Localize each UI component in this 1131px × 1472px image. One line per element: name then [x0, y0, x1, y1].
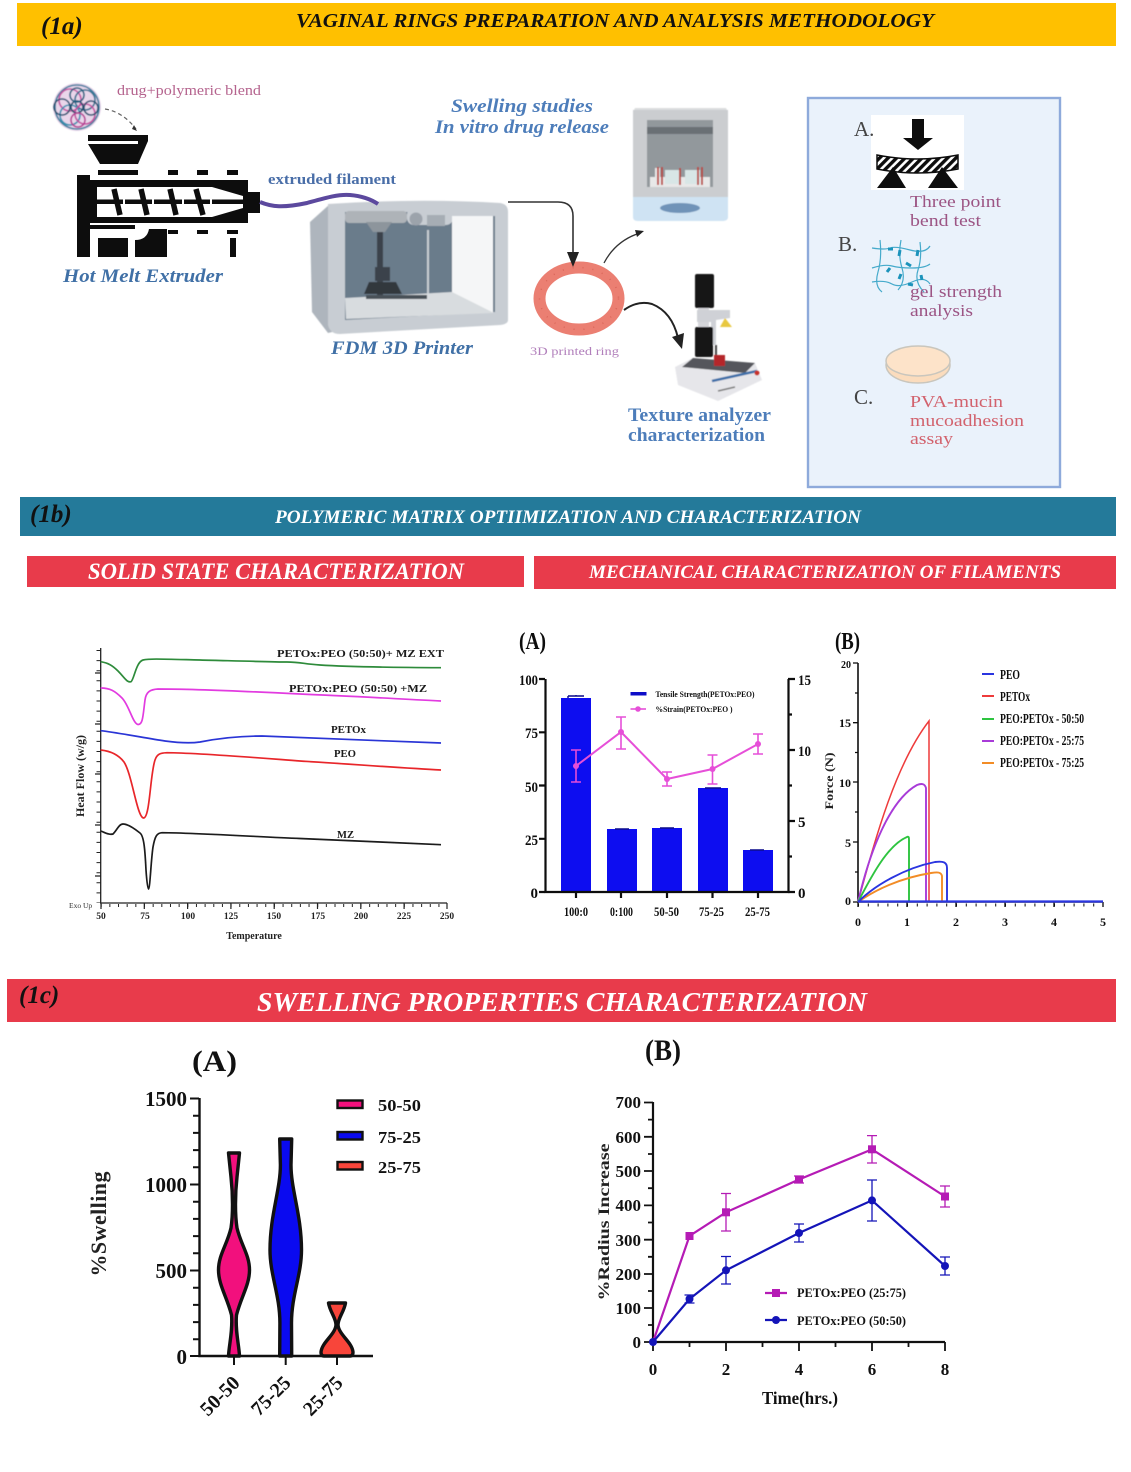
chart: percent radius increase: 6	[868, 1360, 876, 1379]
chart: tensile strength and strain: 25-75	[745, 904, 770, 919]
chart: violin percent swelling: 500	[156, 1259, 187, 1283]
mucoadhesion label: assay	[910, 429, 954, 448]
chart: percent radius increase: 400	[616, 1196, 641, 1215]
curve: PETOx	[101, 731, 441, 743]
legend: PEO:PETOx - 50:50	[1000, 711, 1084, 726]
violin 50-50	[218, 1153, 250, 1356]
chart: tensile strength and strain: 75	[525, 726, 538, 742]
gel strength label: gel strength	[910, 282, 1003, 301]
gel strength label	[910, 282, 1003, 320]
chart: violin percent swelling: 0	[176, 1345, 187, 1369]
legend: 75-25	[378, 1128, 421, 1147]
curve: PETOx:PEO 50:50 + MZ	[101, 688, 441, 725]
strain line	[571, 717, 763, 786]
texture analyzer label: characterization	[628, 425, 765, 446]
section header 1a	[17, 3, 1116, 46]
swelling label	[434, 96, 610, 138]
chart: violin percent swelling: 25-75	[299, 1372, 348, 1421]
chart: DSC thermograms: 150	[267, 912, 281, 922]
chart: DSC thermograms	[69, 648, 454, 942]
arrow: printer to ring	[508, 202, 579, 267]
chart: tensile strength and strain: 15	[798, 673, 811, 689]
legend	[630, 689, 755, 714]
chart: DSC thermograms: PETOx:PEO (50:50) +MZ	[289, 683, 427, 695]
chart: tensile strength and strain: 100	[519, 673, 538, 689]
legend: PETOx:PEO (50:50)	[797, 1313, 906, 1328]
swelling label: In vitro drug release	[434, 117, 610, 138]
chart: violin percent swelling: 1000	[145, 1173, 187, 1197]
chart: DSC thermograms: Heat Flow (w/g)	[73, 735, 87, 817]
curve: PEO	[858, 862, 947, 902]
violin 75-25	[270, 1139, 302, 1356]
series: PETOx:PEO 50:50	[649, 1180, 950, 1346]
chart: DSC thermograms: 100	[181, 912, 195, 922]
chart: percent radius increase: 4	[795, 1360, 804, 1379]
chart: percent radius increase: 300	[616, 1231, 641, 1250]
chart: percent radius increase: 600	[616, 1128, 641, 1147]
panel label: 1c A: (A)	[192, 1045, 237, 1078]
bars	[561, 698, 773, 892]
chart: violin percent swelling: %Swelling	[86, 1172, 111, 1276]
label 1c: (1c)	[19, 982, 59, 1009]
chart: percent radius increase: Time(hrs.)	[762, 1388, 838, 1409]
chart: DSC thermograms: 175	[311, 912, 325, 922]
chart: DSC thermograms: 125	[224, 912, 238, 922]
icon: texture analyzer	[675, 274, 762, 401]
chart: tensile strength and strain: 0	[530, 886, 538, 902]
blend label: drug+polymeric blend	[117, 83, 262, 99]
three point label: bend test	[910, 211, 981, 230]
curve: PEO	[101, 750, 441, 818]
chart: force displacement: 2	[953, 915, 959, 929]
legend	[982, 667, 1084, 770]
subheader: solid state	[27, 556, 524, 587]
title 1c: SWELLING PROPERTIES CHARACTERIZATION	[257, 987, 869, 1017]
legend	[765, 1285, 906, 1328]
chart: percent radius increase: 0	[649, 1360, 657, 1379]
icon: petri dish	[886, 346, 950, 383]
chart: percent radius increase	[596, 1093, 950, 1409]
swelling label: Swelling studies	[451, 96, 593, 117]
panel label: B: (B)	[835, 629, 860, 655]
subheader: solid state: SOLID STATE CHARACTERIZATION	[88, 559, 465, 584]
legend: PETOx:PEO (25:75)	[797, 1285, 906, 1300]
chart: force displacement: 1	[904, 915, 910, 929]
chart: percent radius increase: 700	[616, 1093, 641, 1112]
chart: force displacement: 0	[845, 894, 851, 908]
subheader: mechanical: MECHANICAL CHARACTERIZATION OF FILAMENTS	[588, 562, 1061, 583]
chart: DSC thermograms: PEO	[334, 749, 356, 760]
chart: DSC thermograms: Exo Up	[69, 901, 92, 910]
chart: force displacement: 5	[845, 836, 851, 850]
chart: DSC thermograms: PETOx:PEO (50:50)+ MZ EXT	[277, 648, 445, 660]
chart: force displacement	[822, 660, 1106, 929]
legend: PETOx	[1000, 689, 1030, 704]
section header 1b	[20, 497, 1116, 536]
three point label: Three point	[910, 192, 1001, 211]
chart: percent radius increase: 0	[632, 1333, 641, 1352]
icon: three point bend test	[871, 115, 964, 190]
chart: tensile strength and strain: 0:100	[610, 904, 633, 919]
chart: force displacement: 0	[855, 915, 861, 929]
label 1a: (1a)	[41, 13, 83, 40]
chart: violin percent swelling: 1500	[145, 1087, 187, 1111]
chart: force displacement: Force (N)	[822, 752, 836, 810]
violin 25-75	[321, 1303, 353, 1356]
legend	[338, 1096, 421, 1177]
chart: tensile strength and strain: 100:0	[564, 904, 588, 919]
chart: DSC thermograms: Temperature	[226, 931, 282, 942]
series: PETOx:PEO 25:75	[653, 1136, 950, 1342]
icon: 3D printed ring	[540, 268, 618, 330]
chart: DSC thermograms: MZ	[337, 830, 354, 841]
icon: incubator shaker	[633, 108, 728, 221]
title 1a: VAGINAL RINGS PREPARATION AND ANALYSIS METHODOLOGY	[296, 10, 936, 32]
letter B: B.	[838, 232, 857, 256]
chart: violin percent swelling: 50-50	[196, 1372, 245, 1421]
letter C: C.	[854, 385, 873, 409]
chart: DSC thermograms: 200	[354, 912, 368, 922]
chart: tensile strength and strain: 25	[525, 833, 538, 849]
chart: violin percent swelling: 75-25	[247, 1372, 296, 1421]
ring label: 3D printed ring	[530, 344, 619, 358]
section header 1c	[7, 979, 1116, 1022]
title 1b: POLYMERIC MATRIX OPTIIMIZATION AND CHARACTERIZATION	[274, 507, 862, 528]
chart: DSC thermograms: 50	[96, 912, 106, 922]
chart: percent radius increase: 100	[616, 1299, 641, 1318]
icon: gel network	[872, 240, 930, 292]
label 1b: (1b)	[30, 501, 72, 528]
chart: force displacement: 4	[1051, 915, 1057, 929]
arrow: ring to texture analyzer	[624, 303, 684, 349]
panel label: A: (A)	[519, 629, 546, 655]
panel: mechanical and mucoadhesion tests	[808, 98, 1060, 487]
texture analyzer label: Texture analyzer	[628, 405, 772, 426]
chart: percent radius increase: 200	[616, 1265, 641, 1284]
legend: %Strain(PETOx:PEO )	[656, 704, 733, 714]
mucoadhesion label	[910, 392, 1025, 448]
extruder label: Hot Melt Extruder	[62, 266, 224, 287]
chart: percent radius increase: 2	[722, 1360, 730, 1379]
chart: force displacement: 3	[1002, 915, 1008, 929]
chart: tensile strength and strain: 75-25	[699, 904, 724, 919]
chart: force displacement: 20	[841, 660, 851, 671]
legend: PEO:PETOx - 75:25	[1000, 755, 1084, 770]
curve: MZ	[101, 824, 441, 889]
arrow: blend to hopper	[105, 109, 137, 131]
panel label: 1c B: (B)	[645, 1034, 681, 1067]
chart: DSC thermograms: 250	[440, 912, 454, 922]
mucoadhesion label: mucoadhesion	[910, 411, 1025, 430]
chart: percent radius increase: 8	[941, 1360, 949, 1379]
legend: 50-50	[378, 1096, 421, 1115]
curve: 75:25	[858, 872, 942, 902]
printer label: FDM 3D Printer	[330, 338, 474, 359]
curve: 50:50	[858, 837, 909, 902]
legend: PEO:PETOx - 25:75	[1000, 733, 1084, 748]
chart: tensile strength and strain	[519, 673, 811, 919]
icon: FDM 3D printer	[310, 201, 508, 334]
chart: DSC thermograms: 225	[397, 912, 411, 922]
legend: PEO	[1000, 667, 1020, 682]
chart: force displacement: 15	[839, 716, 851, 730]
icon: hot melt extruder	[77, 135, 260, 257]
chart: percent radius increase: 500	[616, 1162, 641, 1181]
chart: tensile strength and strain: 10	[798, 744, 811, 760]
chart: tensile strength and strain: 5	[798, 815, 806, 831]
curve: 25:75	[858, 784, 926, 902]
subheader: mechanical	[534, 556, 1116, 589]
curve: PETOx	[858, 721, 929, 902]
filament	[260, 195, 378, 206]
mucoadhesion label: PVA-mucin	[910, 392, 1004, 411]
icon: drug polymer blend	[53, 83, 101, 131]
filament label: extruded filament	[268, 172, 396, 188]
legend: 25-75	[378, 1158, 421, 1177]
curve: PETOx:PEO 50:50 + MZ EXT	[101, 659, 441, 682]
chart: violin percent swelling	[86, 1087, 421, 1421]
chart: DSC thermograms: 75	[140, 912, 150, 922]
chart: percent radius increase: %Radius Increase	[596, 1144, 613, 1300]
gel strength label: analysis	[910, 301, 973, 320]
arrow: ring to incubator	[604, 230, 644, 263]
chart: DSC thermograms: PETOx	[331, 725, 366, 736]
chart: tensile strength and strain: 50-50	[654, 904, 679, 919]
three point label	[910, 192, 1001, 230]
chart: force displacement: 10	[839, 776, 851, 790]
chart: tensile strength and strain: 50	[525, 780, 538, 796]
chart: force displacement: 5	[1100, 915, 1106, 929]
texture analyzer label	[628, 405, 772, 446]
letter A: A.	[854, 117, 874, 141]
legend: Tensile Strength(PETOx:PEO)	[656, 689, 755, 699]
chart: tensile strength and strain: 0	[798, 886, 806, 902]
